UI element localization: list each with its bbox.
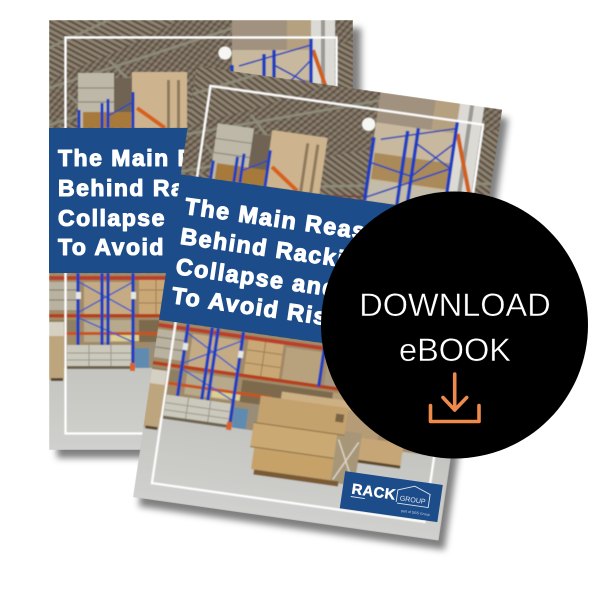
download badge	[321, 192, 588, 458]
badge label second line: eBOOK	[399, 332, 511, 368]
front cover title band: Collapse and How	[174, 253, 401, 311]
back cover	[49, 20, 361, 458]
front cover	[132, 66, 509, 550]
logo: Rack Group: RACK	[351, 482, 397, 504]
back cover title band: The Main Reasons	[58, 145, 284, 171]
back cover title band: Behind Racking	[58, 175, 253, 201]
logo: Rack Group	[340, 471, 443, 522]
back cover title band: To Avoid Risks	[58, 234, 242, 260]
back cover title band	[49, 128, 319, 273]
front cover title band: Behind Racking	[179, 223, 378, 277]
logo: Rack Group: GROUP	[399, 494, 426, 506]
front cover title band: The Main Reasons	[183, 193, 414, 251]
badge label: DOWNLOAD	[359, 287, 551, 323]
front cover title band	[159, 174, 472, 361]
front cover title band: To Avoid Risks	[170, 282, 359, 334]
icon: download arrow	[430, 374, 479, 422]
back cover title band: Collapse and How	[58, 205, 280, 231]
logo: Rack Group: part of SBS Group	[401, 509, 430, 517]
